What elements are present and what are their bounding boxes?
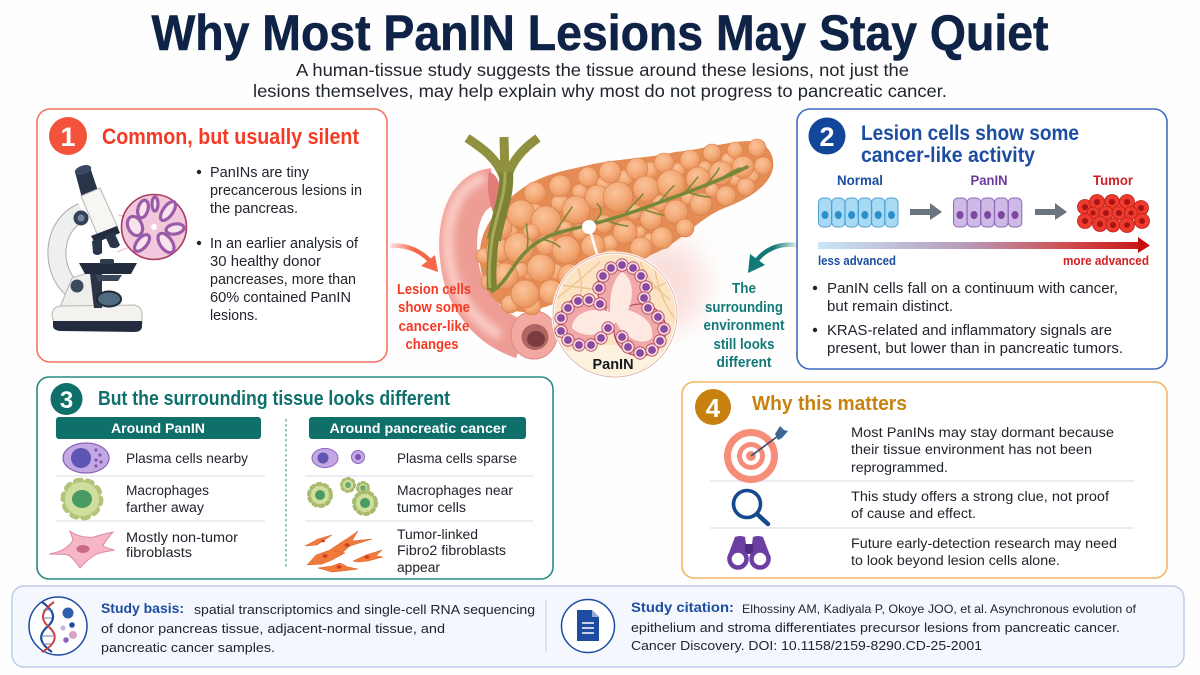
progression labels: more advanced [1063, 254, 1149, 268]
number badge 4: 4 [706, 393, 721, 423]
subtitle: lesions themselves, may help explain why most do not progress to pancreatic cancer. [253, 81, 947, 101]
lesion callout text: show some [398, 300, 470, 316]
study citation text: Study citation: [631, 599, 734, 615]
stage labels: PanIN [970, 173, 1008, 188]
pancreas body [476, 139, 773, 315]
stage labels: Tumor [1093, 173, 1134, 188]
fibroblasts label: Mostly non-tumor [126, 530, 239, 545]
surrounding callout text: environment [704, 318, 785, 334]
bile duct [467, 137, 538, 290]
fibroblasts label: fibroblasts [126, 545, 192, 560]
icon: sparse plasma cells [312, 448, 364, 468]
tumor-linked fibroblasts label [397, 527, 506, 575]
column header: around PanIN [56, 417, 261, 439]
panel 2 heading [861, 122, 1079, 167]
icon: plasma cell [63, 443, 109, 473]
column header: around pancreatic cancer [309, 417, 526, 439]
panel 1: common but usually silent [37, 109, 387, 362]
panel 2 bullet text [813, 281, 1123, 357]
lesion locator dot and line [582, 220, 597, 254]
why-it-matters text 3: to look beyond lesion cells alone. [851, 553, 1060, 568]
number badge 4 [695, 389, 731, 425]
macrophages farther away label [126, 483, 209, 515]
study citation text: Elhossiny AM, Kadiyala P, Okoye JOO, et al. Asynchronous evolution of [742, 602, 1137, 616]
panel 2: lesion cells show cancer-like activity [797, 109, 1167, 369]
study citation text [631, 599, 1137, 653]
surrounding callout text: different [716, 355, 772, 371]
PanIN cells [954, 198, 1022, 227]
surrounding callout text [704, 281, 785, 371]
arrow: normal to PanIN [910, 203, 942, 220]
study basis text: Study basis: [101, 600, 184, 616]
why-it-matters text 3: Future early-detection research may need [851, 536, 1117, 551]
panel 4: why this matters [682, 382, 1167, 578]
lesion callout text: cancer-like [398, 319, 470, 335]
PanIN magnified inset [553, 253, 677, 380]
why-it-matters text 1: reprogrammed. [851, 460, 948, 475]
panel 2 bullet text: but remain distinct. [827, 299, 953, 315]
why-it-matters text 2: of cause and effect. [851, 506, 976, 521]
title: Why Most PanIN Lesions May Stay Quiet [152, 5, 1049, 61]
why-it-matters text 1: Most PanINs may stay dormant because [851, 425, 1114, 440]
panel 2 bullet text: PanIN cells fall on a continuum with cancer, [827, 281, 1118, 297]
panel 3: surrounding tissue [37, 377, 553, 579]
column header: around pancreatic cancer: Around pancreatic cancer [330, 420, 507, 436]
progression labels [818, 254, 1149, 268]
panel 4 heading: Why this matters [752, 393, 907, 415]
number badge 2 [808, 118, 846, 154]
icon: binoculars [727, 536, 771, 568]
progression labels: less advanced [818, 254, 896, 268]
lesion callout text: Lesion cells [397, 282, 471, 298]
study citation text: epithelium and stroma differentiates precursor lesions from pancreatic cancer. [631, 621, 1120, 635]
lesion callout text [397, 282, 471, 353]
lesion callout text: changes [406, 337, 458, 353]
icon: document [562, 600, 614, 652]
callout: surrounding environment [704, 245, 796, 371]
icon: microscope [52, 163, 142, 332]
number badge 3: 3 [60, 387, 73, 414]
footer: study basis and citation [12, 586, 1184, 667]
plasma cells sparse label: Plasma cells sparse [397, 451, 517, 466]
stage labels: Normal [837, 173, 883, 188]
tumor cells [1078, 194, 1150, 232]
fibroblasts label [126, 530, 239, 560]
surrounding callout text: surrounding [705, 300, 783, 316]
number badge 1: 1 [60, 122, 76, 152]
panel 1 bullet text: pancreases, more than [210, 272, 356, 288]
study basis text: of donor pancreas tissue, adjacent-normal tissue, and [101, 621, 445, 636]
panel 1 bullet text [197, 165, 362, 324]
why-it-matters text 3 [851, 536, 1117, 568]
arrow: teal callout arrow [748, 245, 796, 273]
panel 2 heading: Lesion cells show some [861, 122, 1079, 145]
why-it-matters text 2 [851, 489, 1109, 521]
panel 1 bullet text: precancerous lesions in [210, 183, 362, 199]
subtitle [253, 60, 947, 101]
panel 1 bullet text: In an earlier analysis of [210, 236, 359, 252]
normal cells [818, 198, 898, 227]
PanIN label: PanIN [592, 357, 634, 373]
number badge 2: 2 [819, 122, 835, 152]
icon: macrophage [64, 481, 100, 517]
illustration: pancreas with PanIN inset [448, 137, 773, 380]
icon: tumor-linked fibroblasts [305, 531, 383, 572]
icon: macrophage cluster [309, 478, 376, 514]
study basis text: spatial transcriptomics and single-cell RNA sequencing [194, 602, 535, 617]
panel 3 heading: But the surrounding tissue looks different [98, 388, 450, 410]
icon: fibroblast [49, 531, 114, 568]
why-it-matters text 1 [851, 425, 1114, 475]
macrophages farther away label: farther away [126, 500, 204, 515]
study citation text: Cancer Discovery. DOI: 10.1158/2159-8290.CD-25-2001 [631, 639, 982, 653]
macrophages near tumor cells label: tumor cells [397, 500, 466, 515]
surrounding callout text: still looks [714, 337, 774, 353]
tissue magnified inset [122, 194, 186, 260]
gland lobes [555, 259, 670, 359]
icon: DNA and cells [29, 597, 87, 655]
why-it-matters text 2: This study offers a strong clue, not proof [851, 489, 1109, 504]
subtitle: A human-tissue study suggests the tissue around these lesions, not just the [296, 60, 909, 80]
panel 1 heading: Common, but usually silent [102, 124, 360, 149]
tumor-linked fibroblasts label: Fibro2 fibroblasts [397, 543, 506, 558]
column header: around PanIN: Around PanIN [111, 420, 205, 436]
plasma cells nearby label: Plasma cells nearby [126, 451, 248, 466]
number badge 3 [50, 383, 82, 415]
panel 2 heading: cancer-like activity [861, 144, 1035, 167]
number badge 1 [49, 117, 87, 155]
panel 2 bullet text: present, but lower than in pancreatic tumors. [827, 341, 1123, 357]
why-it-matters text 1: their tissue environment has not been [851, 442, 1092, 457]
arrow: PanIN to tumor [1035, 203, 1067, 220]
tumor-linked fibroblasts label: appear [397, 560, 441, 575]
icon: target with arrow [724, 426, 788, 483]
stage labels [837, 173, 1134, 188]
callout: lesion cells [390, 246, 471, 353]
surrounding callout text: The [732, 281, 756, 297]
study basis text: pancreatic cancer samples. [101, 640, 275, 655]
panel 1 bullet text: PanINs are tiny [210, 165, 310, 181]
panel 2 bullet text: KRAS-related and inflammatory signals are [827, 323, 1112, 339]
macrophages near tumor cells label: Macrophages near [397, 483, 514, 498]
tumor-linked fibroblasts label: Tumor-linked [397, 527, 478, 542]
panel 1 bullet text: the pancreas. [210, 201, 298, 217]
pancreatic duct [492, 167, 747, 291]
macrophages farther away label: Macrophages [126, 483, 209, 498]
panel 1 bullet text: 30 healthy donor [210, 254, 321, 270]
panel 1 bullet text: lesions. [210, 308, 258, 324]
panel 1 bullet text: 60% contained PanIN [210, 290, 351, 306]
icon: magnifying glass [734, 490, 768, 524]
progression gradient arrow [818, 237, 1150, 253]
macrophages near tumor cells label [397, 483, 514, 515]
arrow: red callout arrow [390, 246, 438, 272]
study basis text [101, 600, 535, 655]
duodenum [448, 172, 557, 359]
